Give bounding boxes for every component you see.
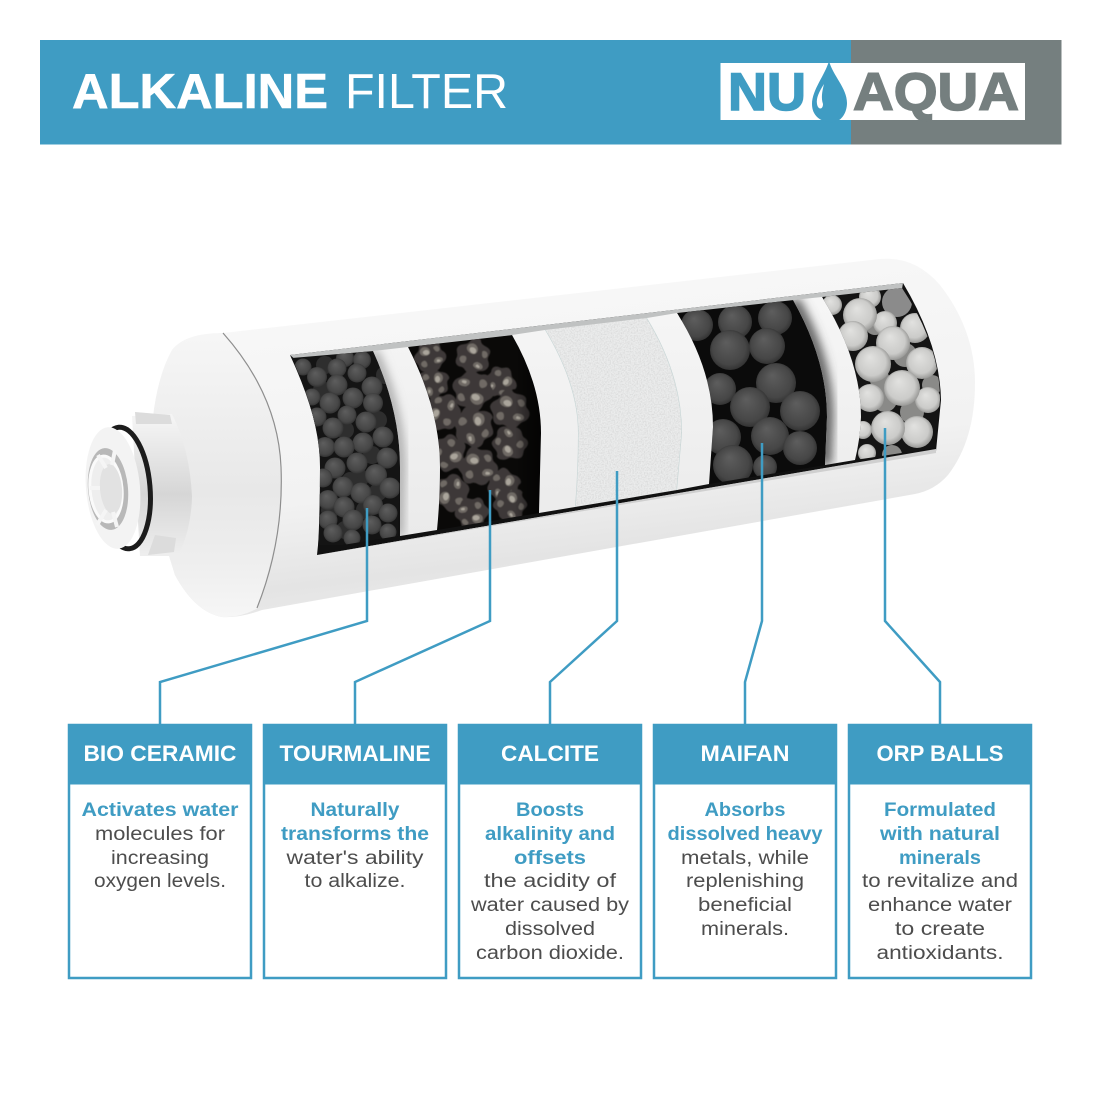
inlet face (81, 425, 145, 551)
description: bio ceramic: molecules for (95, 824, 226, 845)
description: tourmaline (281, 800, 429, 892)
description: bio ceramic: increasing (111, 848, 209, 869)
icon: water drop (812, 61, 847, 122)
description: maifan: replenishing (686, 871, 804, 892)
media: ORP balls (822, 288, 940, 460)
panel: calcite: CALCITE (501, 741, 599, 766)
rubber O-ring (93, 425, 155, 551)
description: tourmaline: water's ability (285, 848, 424, 869)
title: FILTER (345, 65, 508, 119)
title (72, 65, 508, 119)
end cap (153, 333, 281, 617)
panel: bio ceramic: BIO CERAMIC (84, 741, 237, 766)
media: tourmaline stones (405, 330, 545, 535)
leader lines (160, 428, 940, 724)
description: calcite: offsets (514, 848, 586, 869)
panel: bio ceramic (68, 724, 252, 978)
media: maifan stones (677, 300, 820, 482)
description: maifan (668, 800, 823, 940)
description: ORP balls: Formulated (884, 800, 996, 821)
filter cartridge illustration (81, 259, 975, 617)
description: bio ceramic: oxygen levels. (94, 871, 226, 892)
logo: Nu Aqua: AQUA (853, 63, 1019, 122)
header bar (40, 40, 1062, 144)
panel: calcite (458, 724, 642, 978)
description: maifan: minerals. (701, 919, 789, 940)
cutaway opening (290, 283, 941, 555)
description: maifan: metals, while (681, 848, 809, 869)
description: calcite: Boosts (516, 800, 584, 821)
description: ORP balls: antioxidants. (876, 943, 1004, 964)
description: calcite (470, 800, 630, 964)
logo: Nu Aqua (720, 61, 1025, 122)
description: maifan: Absorbs (704, 800, 786, 821)
panel: ORP balls: ORP BALLS (876, 741, 1004, 766)
description: bio ceramic: Activates water (82, 800, 239, 821)
description: calcite: water caused by (470, 895, 630, 916)
panel: tourmaline (263, 724, 447, 978)
panel: ORP balls (848, 724, 1032, 978)
panel: tourmaline: TOURMALINE (280, 741, 430, 766)
media: calcite sleeve (546, 318, 682, 507)
description: bio ceramic (82, 800, 239, 892)
description: calcite: alkalinity and (485, 824, 615, 845)
description: calcite: the acidity of (484, 871, 617, 892)
description: ORP balls: with natural (879, 824, 1000, 845)
description: maifan: beneficial (698, 895, 792, 916)
title: ALKALINE (72, 65, 328, 119)
media: bio ceramic beads (293, 351, 400, 545)
description: ORP balls: to create (895, 919, 985, 940)
description: tourmaline: to alkalize. (304, 871, 406, 892)
description: calcite: carbon dioxide. (476, 943, 624, 964)
description: ORP balls (862, 800, 1018, 964)
description: tourmaline: Naturally (310, 800, 400, 821)
description: calcite: dissolved (505, 919, 595, 940)
retaining bands (373, 297, 861, 536)
description: ORP balls: minerals (899, 848, 981, 869)
filter body (153, 259, 975, 617)
description: maifan: dissolved heavy (668, 824, 823, 845)
description: ORP balls: enhance water (868, 895, 1013, 916)
collar (132, 414, 192, 556)
panel: maifan: MAIFAN (700, 741, 790, 766)
description: tourmaline: transforms the (281, 824, 429, 845)
description: ORP balls: to revitalize and (862, 871, 1018, 892)
logo: Nu Aqua: NU (728, 63, 806, 122)
panel: maifan (653, 724, 837, 978)
